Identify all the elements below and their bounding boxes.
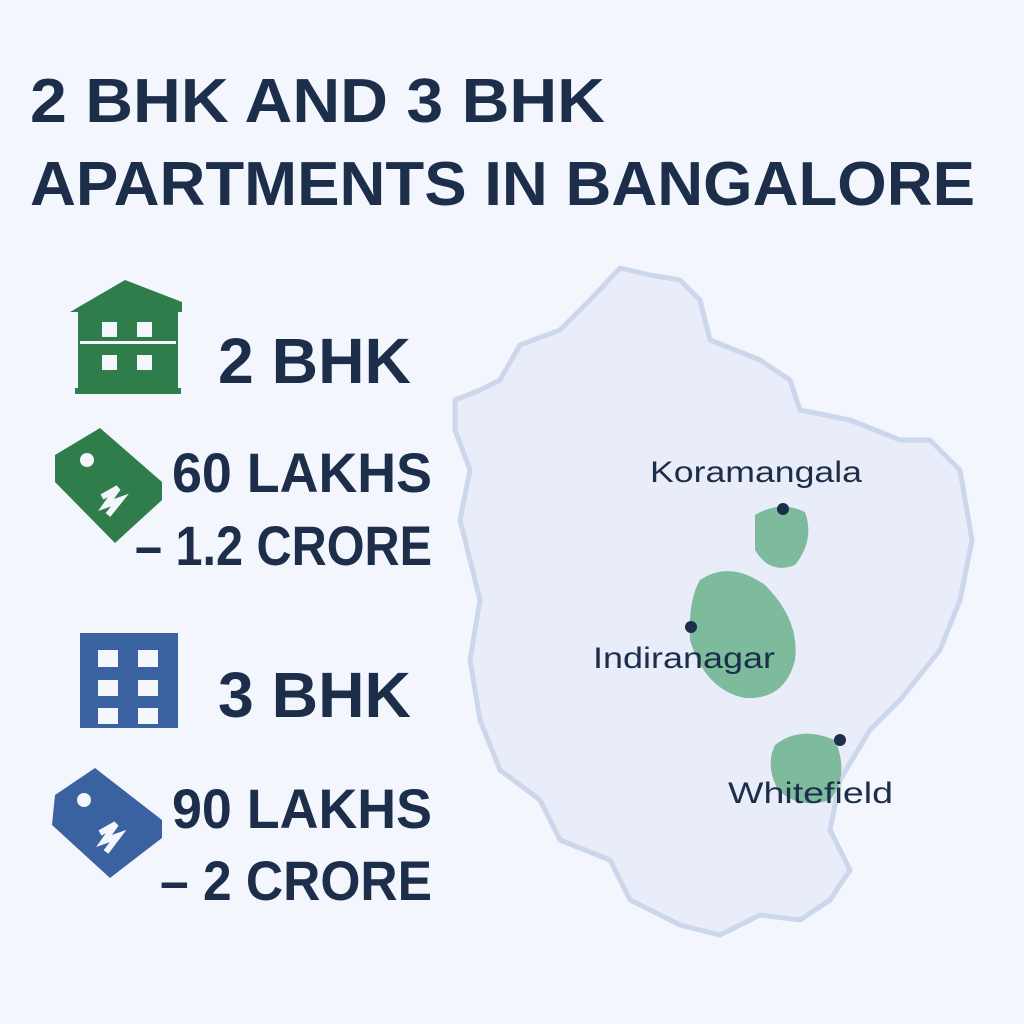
area: Koramangala: Koramangala [650, 456, 862, 489]
price: 3 BHK [160, 777, 432, 912]
title: 2 BHK AND 3 BHK [30, 67, 605, 136]
price: 3 BHK: 90 LAKHS [172, 777, 432, 840]
area: Whitefield: Whitefield [728, 777, 893, 810]
price: 2 BHK: 60 LAKHS [172, 441, 432, 504]
map: Bangalore [455, 268, 972, 935]
heading: 2 BHK: 2 BHK [218, 325, 411, 397]
heading: 3 BHK: 3 BHK [218, 659, 411, 731]
title [30, 67, 975, 219]
title: APARTMENTS IN BANGALORE [30, 150, 975, 219]
price: 2 BHK: – 1.2 CRORE [135, 514, 432, 577]
area: Indiranagar: Indiranagar [593, 642, 775, 675]
area: Whitefield [728, 734, 893, 810]
icon: 2 BHK house [70, 280, 182, 394]
area: Koramangala [650, 456, 862, 568]
price: 2 BHK [135, 441, 432, 577]
price: 3 BHK: – 2 CRORE [160, 849, 432, 912]
icon: green price tag [55, 428, 162, 543]
area: Indiranagar [593, 571, 796, 698]
icon: 3 BHK building [80, 633, 178, 728]
icon: blue price tag [52, 768, 162, 878]
